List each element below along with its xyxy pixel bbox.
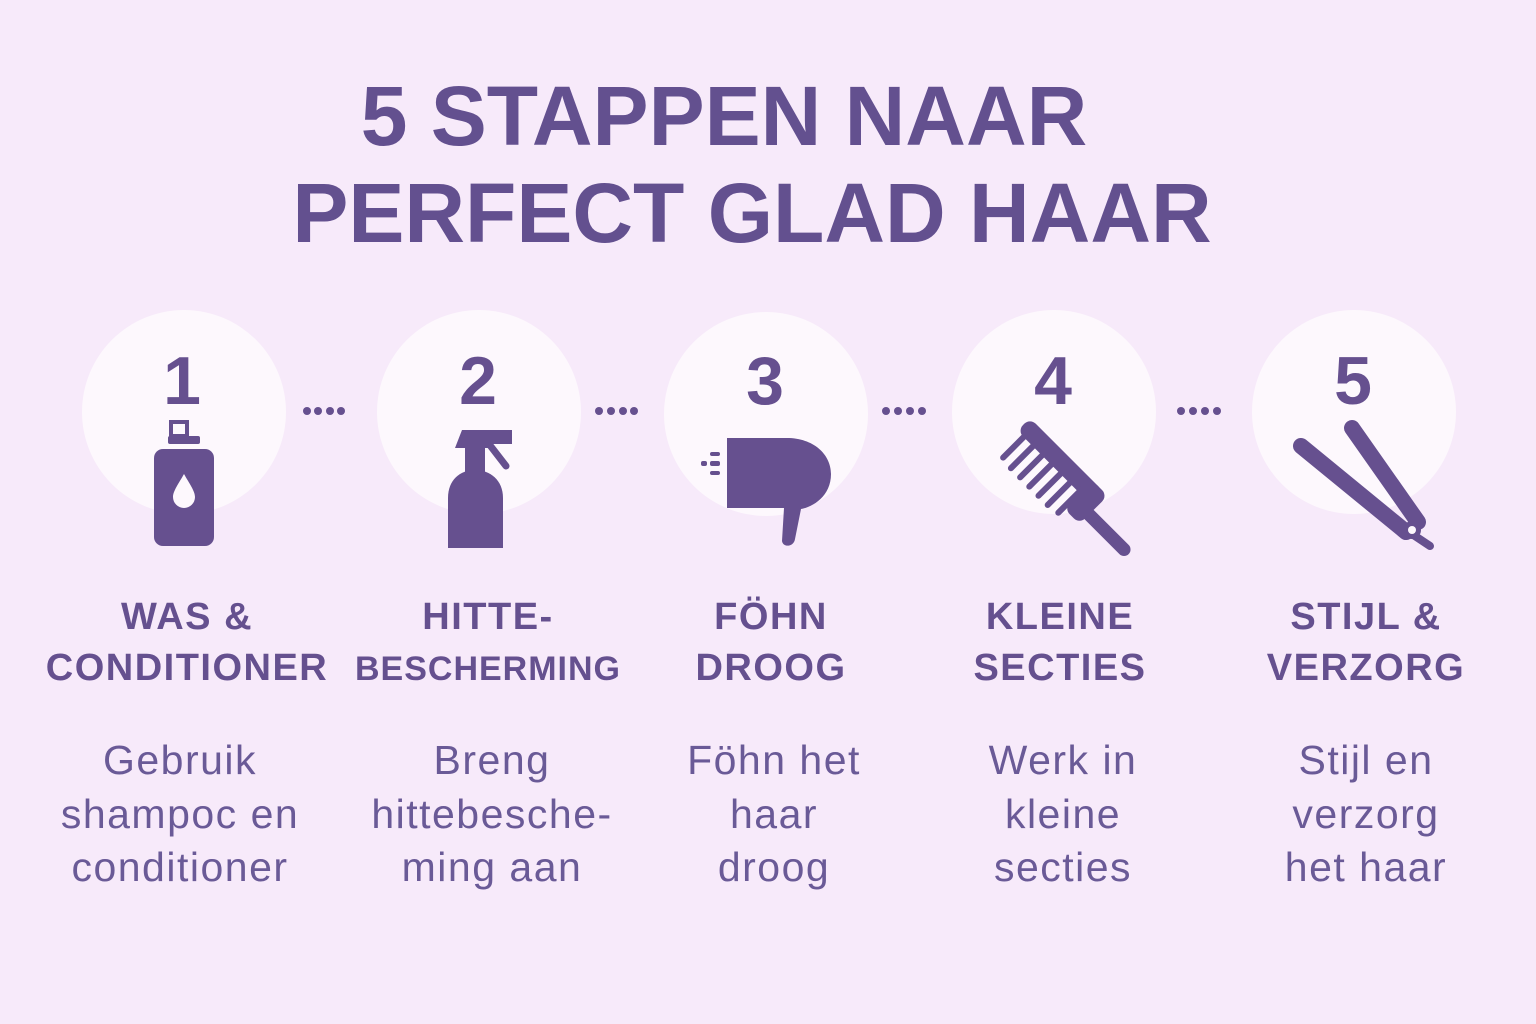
heading 1: CONDITIONER [46, 647, 328, 689]
description 1: Gebruik [103, 737, 257, 783]
step 5 circle [1252, 310, 1456, 514]
step 1 circle [82, 310, 286, 514]
description 4: Werk in [989, 737, 1137, 783]
description 4: secties [994, 844, 1132, 890]
heading 5: VERZORG [1267, 647, 1465, 689]
description 1: conditioner [71, 844, 289, 890]
step 3 circle [664, 312, 868, 516]
heading 4 [973, 596, 1147, 689]
icon: shampoo bottle [154, 422, 214, 546]
heading 2 [355, 596, 621, 688]
description 5: Stijl en [1298, 737, 1434, 783]
description 2: hittebesche- [371, 790, 613, 836]
heading 2: HITTE- [422, 596, 554, 638]
step 2 circle [377, 310, 581, 514]
icon: comb [993, 418, 1147, 572]
heading 3 [695, 596, 847, 689]
description 3: haar [730, 790, 818, 836]
title: 5 STAPPEN NAAR [361, 69, 1087, 163]
heading 3: DROOG [695, 647, 847, 689]
step 4 circle [952, 310, 1156, 514]
heading 1: WAS & [121, 596, 253, 638]
description 3 [687, 737, 861, 890]
step 1 circle: 1 [163, 343, 201, 419]
step 4 circle: 4 [1034, 343, 1072, 419]
description 2 [371, 737, 613, 890]
description 1: shampoc en [61, 790, 299, 836]
title [292, 69, 1212, 260]
description 1 [61, 737, 299, 890]
heading 1 [46, 596, 328, 689]
description 4 [988, 737, 1137, 890]
description 3: Föhn het [687, 737, 861, 783]
step 3 circle: 3 [746, 343, 784, 419]
description 5: verzorg [1292, 790, 1440, 836]
dotted connectors [303, 407, 1221, 415]
description 2: ming aan [402, 844, 582, 890]
title: PERFECT GLAD HAAR [292, 166, 1212, 260]
step 5 circle: 5 [1334, 343, 1372, 419]
heading 3: FÖHN [714, 596, 828, 638]
description 5: het haar [1285, 844, 1447, 890]
step 2 circle: 2 [459, 343, 497, 419]
heading 5 [1267, 596, 1465, 689]
icon: flat iron [1301, 428, 1430, 546]
heading 4: SECTIES [973, 647, 1147, 689]
heading 2: BESCHERMING [355, 650, 621, 688]
description 4: kleine [1005, 790, 1121, 836]
heading 4: KLEINE [986, 596, 1134, 638]
icon: hair dryer [701, 438, 831, 546]
description 3: droog [718, 844, 830, 890]
description 5 [1285, 737, 1447, 890]
heading 5: STIJL & [1290, 596, 1442, 638]
icon: spray bottle [448, 430, 512, 548]
description 2: Breng [434, 737, 550, 783]
